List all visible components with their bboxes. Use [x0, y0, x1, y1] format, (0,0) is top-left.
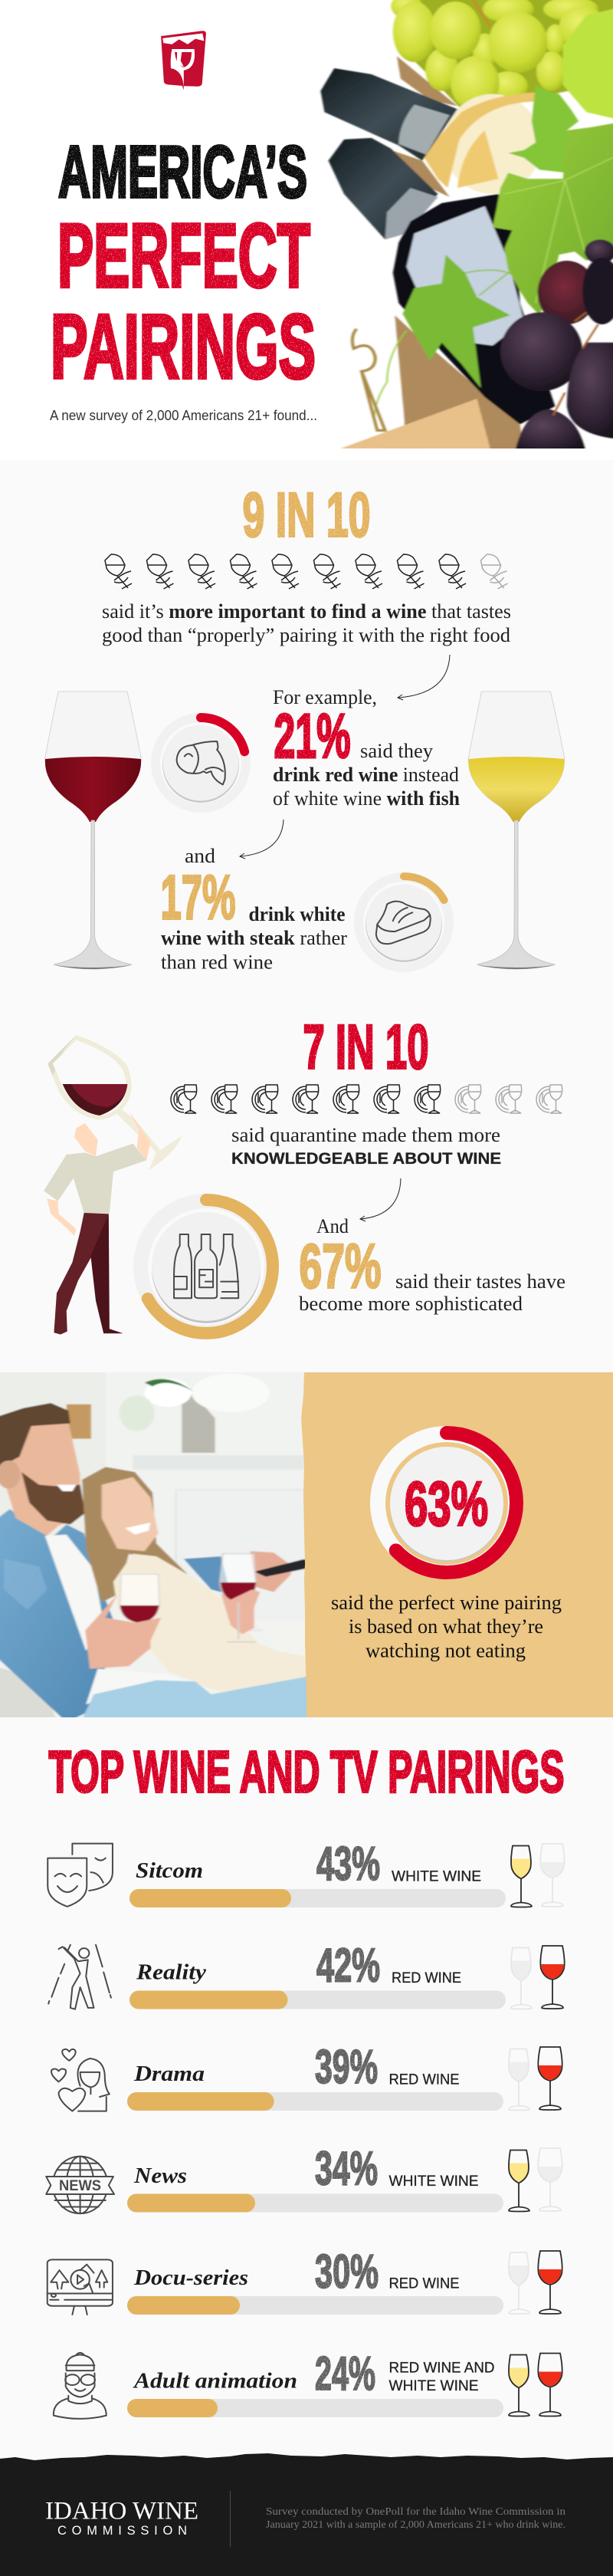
- text: drink white: than red wine: [161, 951, 273, 974]
- panel: 7 in 10: [44, 1012, 565, 1339]
- red wine glass: [45, 692, 141, 969]
- progress bar: [129, 1990, 506, 2009]
- label: Docu-series: [133, 2266, 248, 2290]
- text: tastes more sophisticated: become more sophisticated: [299, 1293, 523, 1315]
- glasses: both highlighted: [509, 2354, 562, 2417]
- progress bar: [127, 2296, 503, 2315]
- text: perfect wine pairing: said the perfect wine pairing: [331, 1592, 562, 1614]
- percentage: 42%: [316, 1940, 380, 1992]
- icon: news globe: NEWS: [59, 2178, 101, 2194]
- text: perfect wine pairing: is based on what they’re: [349, 1615, 543, 1638]
- donut: 63 percent: [370, 1426, 523, 1579]
- wine type: WHITE WINE: [389, 2377, 478, 2394]
- label: Drama: [133, 2062, 205, 2086]
- progress bar: [127, 2399, 503, 2417]
- icon: news globe: [46, 2157, 114, 2213]
- panel: gold background: [301, 1372, 613, 1717]
- survey note: [266, 2506, 565, 2531]
- glasses: white highlighted: [511, 1844, 565, 1907]
- logo: idaho wine commission: COMMISSION: [57, 2524, 187, 2538]
- icon: wine commission logo: [161, 31, 206, 90]
- text: drink white: wine with steak rather: [161, 927, 347, 949]
- stat: 63 percent: 63%: [405, 1469, 488, 1539]
- panel: 9 in 10: [0, 460, 613, 974]
- panel: footer: [0, 2453, 613, 2576]
- percentage: 39%: [315, 2041, 378, 2094]
- logo: idaho wine commission: IDAHO WINE: [45, 2498, 198, 2525]
- text: more important: good than “properly” pairing it with the right food: [102, 624, 510, 646]
- subtitle: A new survey of 2,000 Americans 21+ found...: [50, 407, 317, 423]
- title: AMERICA’S: [58, 131, 307, 213]
- wine type: WHITE WINE: [392, 1868, 481, 1884]
- text: perfect wine pairing: [331, 1592, 562, 1662]
- illustration: man drinking from giant glass: [44, 1035, 182, 1335]
- icon: comedy masks: [48, 1844, 113, 1907]
- stat: 17 percent: 17%: [161, 863, 236, 932]
- text: knowledgeable about wine: [231, 1124, 501, 1168]
- glasses: white highlighted: [509, 2148, 562, 2211]
- row: sitcom: [48, 1838, 565, 1907]
- row: drama: [51, 2041, 562, 2111]
- title: [51, 131, 316, 398]
- survey note: Survey conducted by OnePoll for the Idaho Wine Commission in: [266, 2506, 565, 2518]
- survey note: January 2021 with a sample of 2,000 Americans 21+ who drink wine.: [266, 2519, 565, 2531]
- text: drink white: drink white: [248, 903, 345, 925]
- wine type: RED WINE AND: [389, 2360, 495, 2377]
- text: more important: [102, 600, 511, 646]
- row: reality: [48, 1940, 565, 2009]
- arrow: [360, 1178, 401, 1221]
- progress bar: [129, 1889, 506, 1907]
- icon: woman with hearts: [51, 2049, 110, 2111]
- icon: video screen with forest: [48, 2259, 113, 2315]
- percentage: 30%: [315, 2246, 379, 2298]
- row: docu-series: [48, 2246, 562, 2315]
- icon: three bottles: [174, 1234, 238, 1298]
- photo: couple with wine and remote: [0, 1372, 306, 1717]
- percentage: 24%: [315, 2348, 375, 2400]
- donut: 21 percent fish: [151, 713, 251, 813]
- row: news: [46, 2142, 562, 2213]
- progress bar: [127, 2092, 503, 2111]
- text: perfect wine pairing: watching not eating: [366, 1639, 526, 1662]
- logo: idaho wine commission: [45, 2498, 198, 2538]
- text: tastes more sophisticated: said their tastes have: [395, 1270, 565, 1293]
- text: more important: said it’s more important to find a wine that tastes: [102, 600, 511, 623]
- label: Adult animation: [133, 2369, 297, 2394]
- panel: header: [50, 0, 613, 449]
- icon row: 7 of 10 wine glasses: [171, 1085, 562, 1113]
- text: knowledgeable about wine: said quarantine made them more: [231, 1124, 500, 1146]
- heading: 9 in 10: 9 IN 10: [242, 480, 371, 550]
- text: and: And: [316, 1215, 349, 1237]
- icon: steak: [376, 902, 431, 944]
- text: and: and: [185, 845, 215, 867]
- wine type: WHITE WINE: [389, 2173, 478, 2190]
- wine type: RED WINE: [389, 2072, 460, 2088]
- wine type: RED WINE: [389, 2275, 460, 2292]
- heading: 7 in 10: 7 IN 10: [303, 1012, 429, 1083]
- glasses: red highlighted: [511, 1946, 565, 2009]
- arrow: [398, 655, 450, 700]
- divider: [230, 2491, 231, 2547]
- icon: cartoon man with beanie: [54, 2353, 107, 2419]
- text: drink red wine: said they: [360, 740, 433, 762]
- icon: performer on stage: [48, 1945, 111, 2009]
- photo: bottles grapes and leaves: [320, 0, 613, 455]
- title: PERFECT: [57, 205, 310, 307]
- label: Sitcom: [136, 1858, 203, 1883]
- text: drink white: [161, 903, 347, 974]
- stat: 21 percent: 21%: [274, 702, 351, 771]
- row: adult animation: [54, 2348, 562, 2419]
- text: knowledgeable about wine: KNOWLEDGEABLE ABOUT WINE: [231, 1150, 501, 1168]
- icon row: 9 of 10 clinking glasses: [105, 554, 507, 589]
- white wine glass: [468, 692, 565, 969]
- text: drink red wine: of white wine with fish: [273, 787, 461, 810]
- glasses: red highlighted: [509, 2047, 562, 2110]
- text: for example: For example,: [273, 686, 377, 708]
- label: News: [133, 2164, 187, 2188]
- text: drink red wine: drink red wine instead: [273, 764, 459, 786]
- stat: 67 percent: 67%: [299, 1231, 382, 1302]
- wine type: RED WINE: [392, 1970, 461, 1986]
- label: Reality: [136, 1960, 206, 1984]
- donut: 17 percent steak: [354, 872, 454, 972]
- panel: couple watching tv: [0, 1365, 613, 1727]
- text: drink red wine: [273, 740, 461, 810]
- percentage: 43%: [316, 1838, 380, 1891]
- text: tastes more sophisticated: [299, 1270, 565, 1315]
- title: PAIRINGS: [51, 296, 316, 398]
- percentage: 34%: [315, 2142, 378, 2196]
- wine type: [389, 2360, 495, 2394]
- progress bar: [127, 2194, 503, 2213]
- arrow: [240, 820, 284, 859]
- icon: fish: [177, 741, 225, 784]
- donut: 67 percent bottles: [133, 1194, 279, 1339]
- glasses: red highlighted: [509, 2251, 562, 2314]
- panel: top wine and tv pairings: [46, 1739, 565, 2419]
